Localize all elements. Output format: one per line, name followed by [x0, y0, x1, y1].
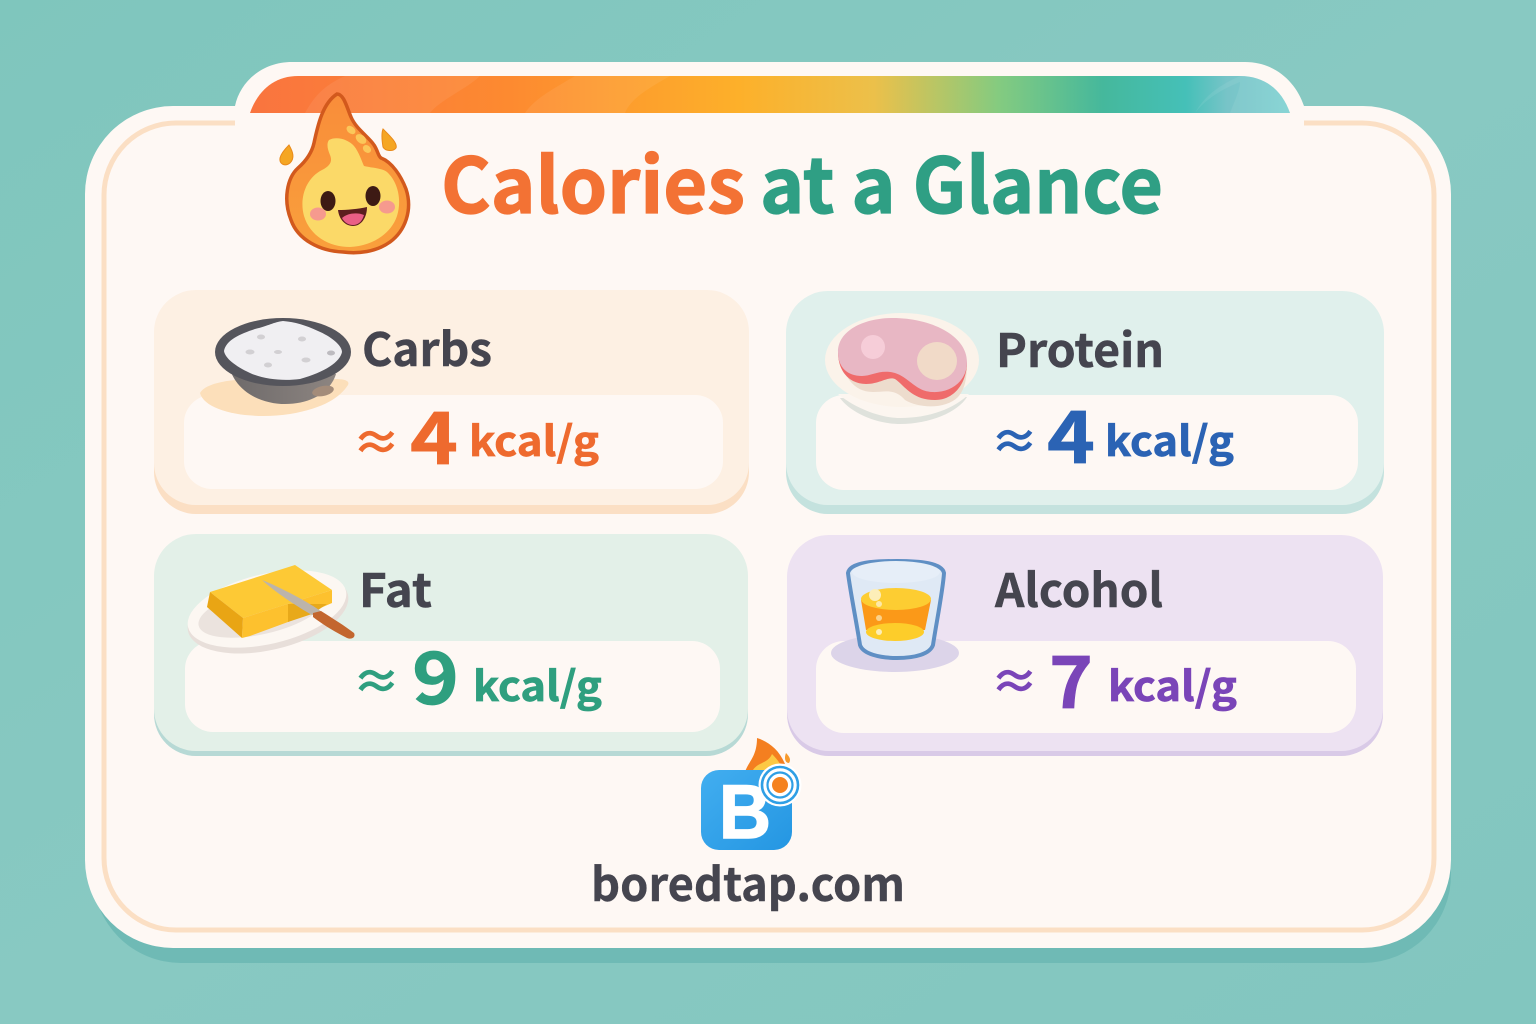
value: alcohol [990, 624, 1237, 729]
title: Calories [441, 125, 745, 235]
value box: fat [185, 641, 720, 732]
value: carbs: kcal/g [469, 408, 599, 468]
panel: carbs [154, 290, 749, 514]
value: alcohol: 7 [1049, 624, 1093, 729]
title: at a Glance [760, 125, 1163, 235]
value: carbs: 4 [410, 380, 458, 485]
value: protein [990, 379, 1234, 484]
logo: boredtap icon: B [719, 770, 771, 855]
value: alcohol: kcal/g [1108, 653, 1237, 713]
label: alcohol: Alcohol [994, 555, 1163, 621]
value box: protein [816, 395, 1358, 490]
value: carbs: ≈ [352, 407, 401, 473]
value: carbs [352, 380, 599, 485]
card inner border [104, 123, 1434, 930]
label: fat: Fat [359, 555, 432, 621]
label: protein: Protein [996, 315, 1164, 381]
panel: alcohol [787, 535, 1383, 756]
title [441, 125, 1163, 235]
value: fat: ≈ [352, 646, 401, 712]
value: fat: kcal/g [473, 653, 602, 713]
value: protein: kcal/g [1105, 408, 1234, 468]
icon: rice bowl [200, 318, 351, 416]
label: carbs: Carbs [362, 314, 492, 380]
icon: glass of alcohol [831, 561, 959, 672]
rainbow header bar [250, 76, 1290, 113]
value: protein: 4 [1047, 379, 1095, 484]
logo: boredtap icon [701, 738, 802, 855]
main card [85, 62, 1451, 948]
value box: alcohol [816, 641, 1356, 733]
icon: steak on plate [825, 313, 979, 424]
panel: fat [154, 534, 748, 756]
icon: butter and knife [180, 557, 356, 667]
value: fat: 9 [412, 620, 459, 725]
icon: flame mascot [280, 94, 409, 253]
value: protein: ≈ [990, 406, 1039, 472]
value: fat [352, 620, 602, 725]
panel: protein [786, 291, 1384, 514]
value: alcohol: ≈ [990, 646, 1039, 712]
website text: boredtap.com [591, 849, 905, 915]
value box: carbs [184, 395, 723, 489]
card shadow [93, 200, 1451, 963]
